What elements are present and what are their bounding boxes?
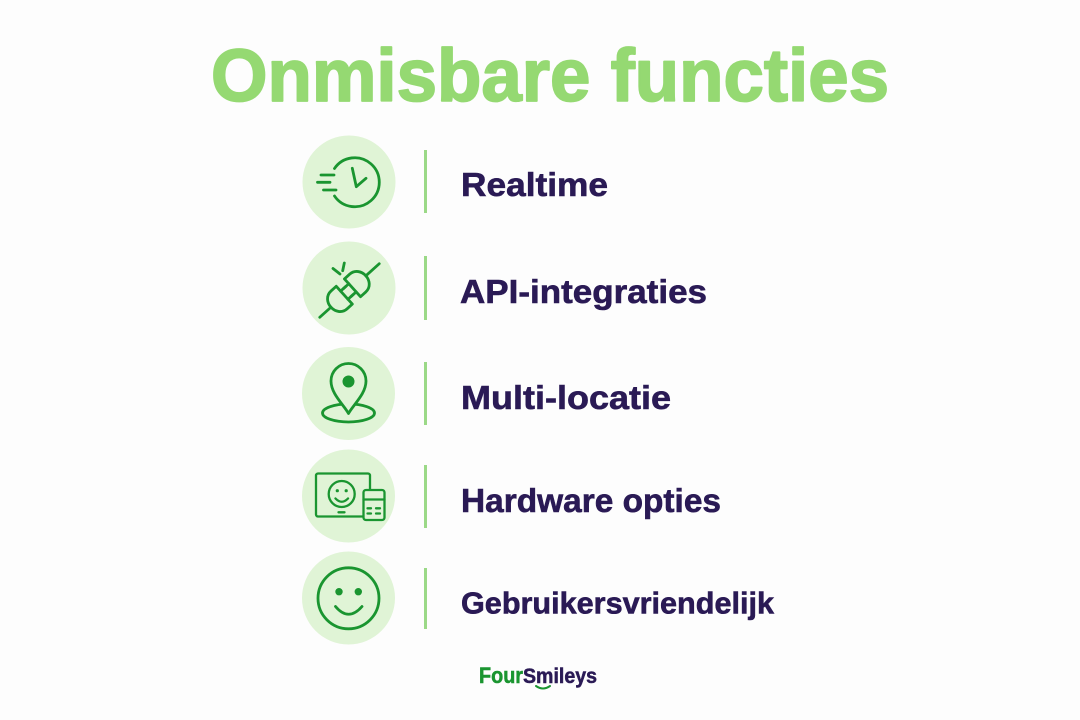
label: Multi-locatie: Multi-locatie [461,379,671,416]
logo: FourSmileys: Four [479,663,523,688]
logo: FourSmileys [479,663,597,688]
icon: plug connection [302,242,396,334]
icon: clock with speed lines [302,136,396,228]
row: Gebruikersvriendelijk [302,552,775,644]
row: API-integraties [302,242,707,334]
title: Onmisbare functies [211,34,889,117]
logo: FourSmileys: Smileys [523,665,597,688]
divider [424,362,427,425]
divider [424,150,427,213]
label: Gebruikersvriendelijk: Gebruikersvriendelijk [461,586,775,620]
icon: map pin [302,347,395,440]
icon: smiley [302,552,395,644]
label: Hardware opties: Hardware opties [461,482,721,519]
divider [424,568,427,629]
icon: tablet and calculator [302,450,395,542]
row: Realtime [302,136,608,228]
label: Realtime: Realtime [461,166,608,203]
label: API-integraties: API-integraties [460,273,707,310]
divider [424,256,427,320]
divider [424,465,427,528]
row: Multi-locatie [302,347,671,440]
row: Hardware opties [302,450,721,542]
